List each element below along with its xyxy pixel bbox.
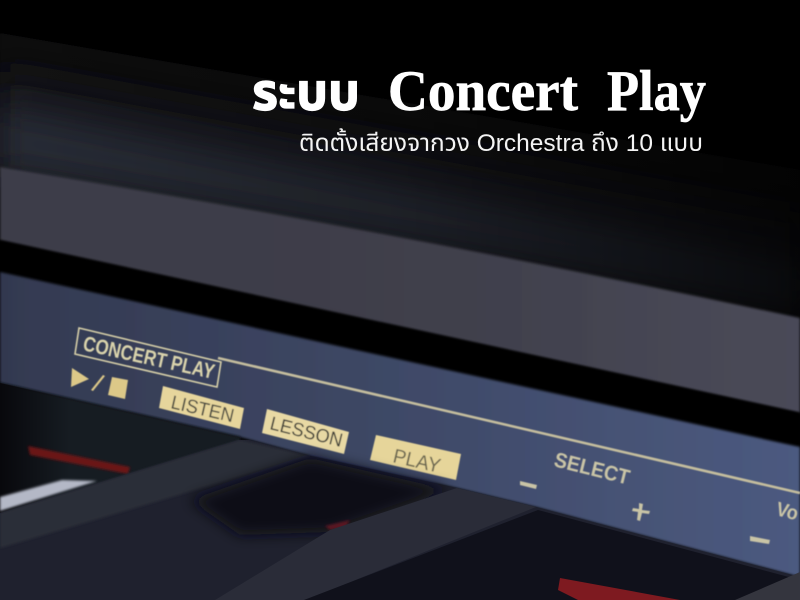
black gap <box>0 241 800 447</box>
title: Play <box>607 60 706 123</box>
button label: PLAY <box>370 435 461 480</box>
title: Concert <box>388 60 578 123</box>
SELECT label with minus and plus: SELECT <box>552 449 632 490</box>
control panel strip <box>0 272 800 577</box>
title: ระบบ <box>252 64 360 122</box>
icon: play / stop <box>71 368 128 399</box>
foreground: second key bar <box>215 488 800 600</box>
title <box>252 60 706 123</box>
SELECT label with minus and plus <box>520 449 650 521</box>
gold rule line <box>218 358 800 493</box>
VOLUME label (clipped) and minus <box>750 499 800 544</box>
button label: PLAY: PLAY <box>391 445 443 478</box>
CONCERT PLAY label box: CONCERT PLAY <box>81 332 217 384</box>
button label: LISTEN <box>159 386 244 429</box>
subtitle: ติดตั้งเสียงจากวง Orchestra ถึง 10 แบบ <box>299 127 703 157</box>
button label: LESSON: LESSON <box>268 413 345 452</box>
foreground: first key bar <box>0 440 800 600</box>
keyboard shadow and red felt <box>0 383 240 520</box>
button label: LISTEN: LISTEN <box>169 392 236 427</box>
grey fallboard band <box>0 167 800 413</box>
